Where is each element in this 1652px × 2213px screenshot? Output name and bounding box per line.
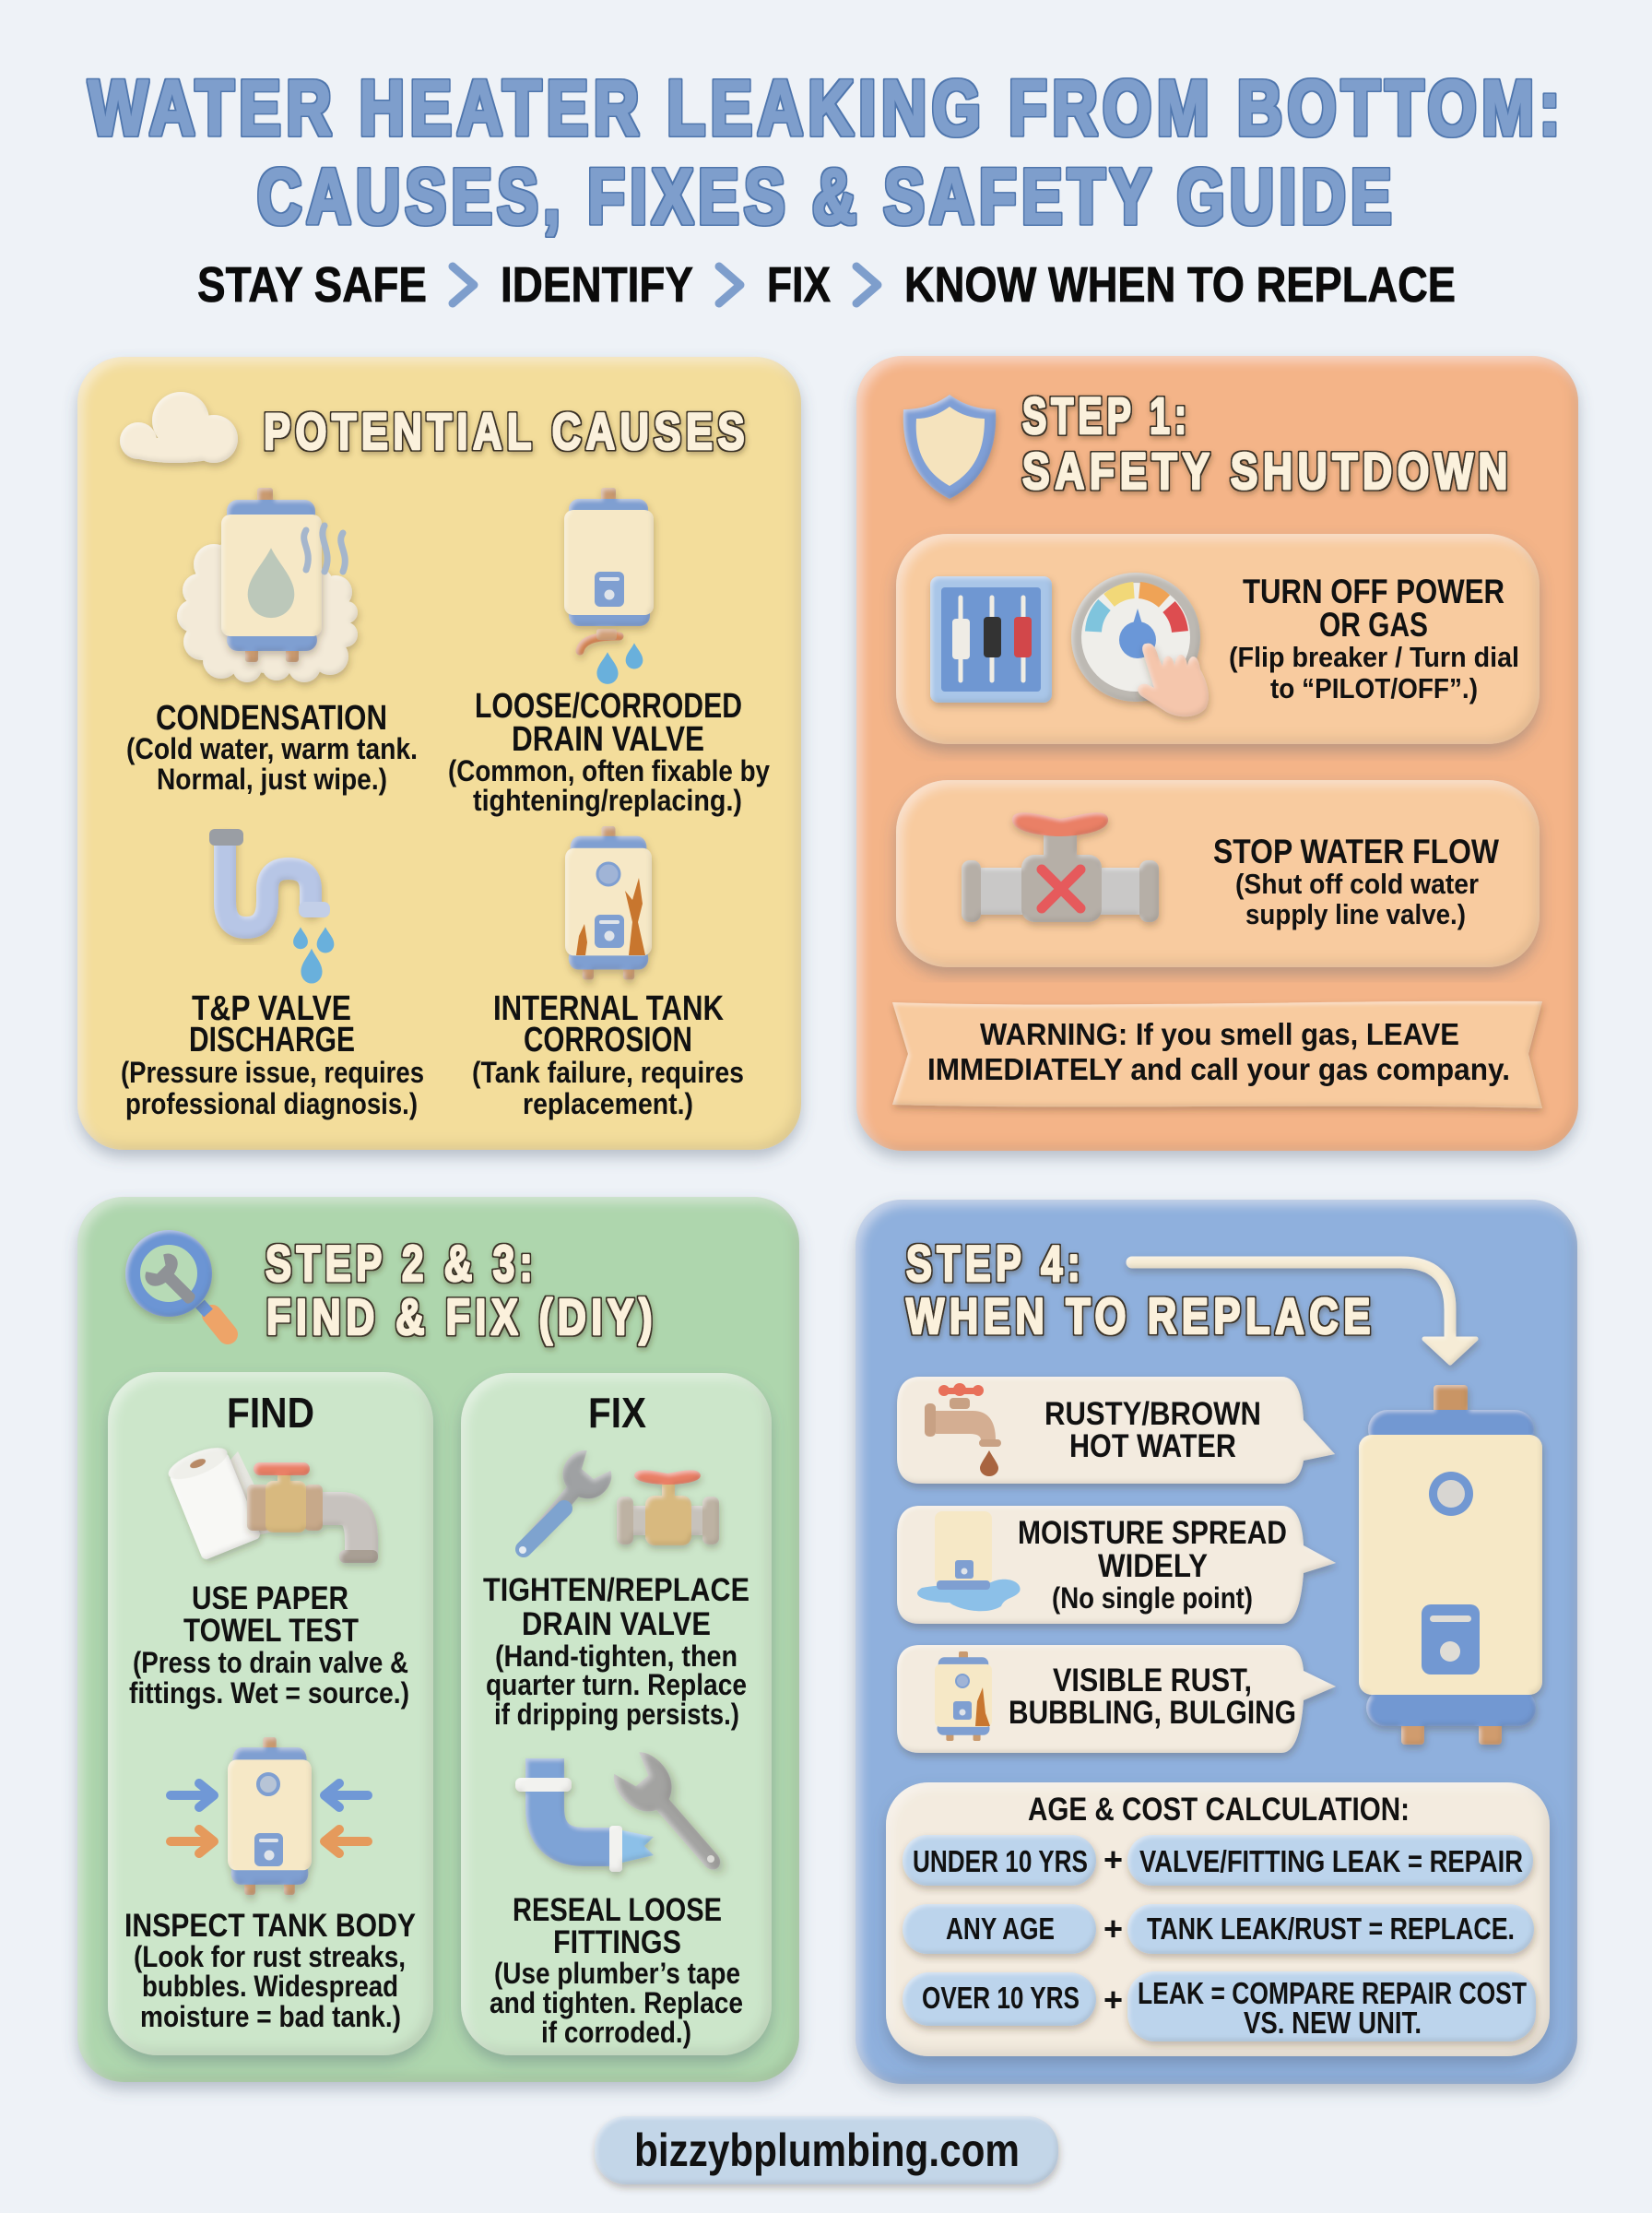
- heading: step 2 and 3: STEP 2 & 3:: [266, 1235, 537, 1292]
- row: any age: +: [1103, 1910, 1123, 1947]
- text: rusty water: HOT WATER: [1069, 1428, 1236, 1464]
- row: over 10 years: LEAK = COMPARE REPAIR COST: [1138, 1976, 1527, 2010]
- text: stop water flow: [1213, 833, 1499, 930]
- bubble: moisture spread: [897, 1506, 1336, 1624]
- text: paper towel test: TOWEL TEST: [183, 1613, 359, 1649]
- text: stop water flow: supply line valve.): [1245, 898, 1466, 930]
- text: paper towel test: USE PAPER: [192, 1580, 348, 1616]
- text: rusty water: RUSTY/BROWN: [1044, 1396, 1261, 1432]
- text: internal corrosion: INTERNAL TANK: [493, 989, 724, 1028]
- text: internal corrosion: CORROSION: [524, 1021, 692, 1059]
- text: drain valve: LOOSE/CORRODED: [475, 687, 742, 726]
- text: drain valve: DRAIN VALVE: [512, 720, 704, 759]
- heading: find: FIND: [227, 1389, 314, 1437]
- icon: wrench and drain valve: [514, 1445, 719, 1555]
- text: condensation: (Cold water, warm tank.: [126, 732, 418, 765]
- text: tighten replace drain valve: (Hand-tighten, then: [495, 1639, 738, 1673]
- heading: step 1: [1022, 386, 1513, 500]
- subtitle: process steps: [197, 257, 1456, 313]
- heading: step 1: STEP 1:: [1022, 386, 1191, 444]
- row: any age: [903, 1904, 1534, 1954]
- title: [88, 65, 1565, 240]
- text: reseal fittings: RESEAL LOOSE: [513, 1892, 722, 1928]
- footer: website pill: [595, 2116, 1058, 2184]
- icon: breaker panel: [930, 576, 1052, 703]
- text: turn off power: OR GAS: [1319, 606, 1428, 644]
- text: moisture spread: WIDELY: [1098, 1548, 1208, 1584]
- text: reseal fittings: if corroded.): [541, 2016, 691, 2049]
- panel: step 2 and 3 find and fix: [77, 1197, 799, 2082]
- row: any age: TANK LEAK/RUST = REPLACE.: [1147, 1911, 1515, 1946]
- warning ribbon: WARNING: If you smell gas, LEAVE: [980, 1017, 1459, 1051]
- text: stop water flow: (Shut off cold water: [1235, 868, 1479, 900]
- text: paper towel test: (Press to drain valve &: [133, 1646, 408, 1679]
- text: turn off power: TURN OFF POWER: [1243, 573, 1504, 610]
- text: inspect tank body: [124, 1908, 416, 2033]
- text: inspect tank body: (Look for rust streaks,: [134, 1940, 406, 1973]
- column: fix: [461, 1373, 772, 2055]
- text: drain valve: [448, 687, 770, 817]
- text: T&P valve: professional diagnosis.): [125, 1087, 418, 1120]
- text: inspect tank body: bubbles. Widespread: [142, 1970, 398, 2003]
- text: tighten replace drain valve: TIGHTEN/REPLACE: [483, 1572, 749, 1608]
- subtitle: process steps: STAY SAFE: [197, 257, 427, 313]
- text: paper towel test: [129, 1580, 409, 1710]
- text: paper towel test: fittings. Wet = source.): [129, 1676, 409, 1710]
- text: drain valve: tightening/replacing.): [473, 784, 742, 817]
- icon: pipe tape and wrench: [515, 1746, 738, 1885]
- warning ribbon: IMMEDIATELY and call your gas company.: [927, 1052, 1510, 1086]
- heading: step 1: SAFETY SHUTDOWN: [1022, 442, 1513, 500]
- row: over 10 years: OVER 10 YRS: [922, 1981, 1080, 2015]
- card: turn off power: [896, 534, 1540, 744]
- panel: potential causes: [77, 357, 801, 1150]
- heading: step 2 and 3: FIND & FIX (DIY): [266, 1288, 657, 1345]
- row: under 10 years: [903, 1835, 1533, 1886]
- text: T&P valve: T&P VALVE: [192, 989, 351, 1028]
- arrow: to water heater: [1132, 1262, 1476, 1363]
- text: tighten replace drain valve: DRAIN VALVE: [522, 1606, 711, 1642]
- text: T&P valve: DISCHARGE: [189, 1021, 355, 1059]
- text: T&P valve: (Pressure issue, requires: [121, 1056, 424, 1089]
- text: moisture spread: MOISTURE SPREAD: [1018, 1515, 1287, 1551]
- heading: fix: FIX: [588, 1389, 646, 1437]
- text: inspect tank body: moisture = bad tank.): [140, 2000, 401, 2033]
- text: inspect tank body: INSPECT TANK BODY: [124, 1908, 416, 1944]
- text: reseal fittings: (Use plumber’s tape: [494, 1957, 740, 1990]
- text: turn off power: [1229, 573, 1519, 704]
- panel: step 1 safety shutdown: [856, 356, 1578, 1151]
- text: tighten replace drain valve: quarter turn. Replace: [486, 1668, 747, 1701]
- text: tighten replace drain valve: [483, 1572, 749, 1731]
- icon: inspect tank with arrows: [171, 1737, 368, 1895]
- row: under 10 years: UNDER 10 YRS: [913, 1844, 1088, 1878]
- icon: large water heater: [1359, 1385, 1542, 1745]
- icon: heater with puddle: [917, 1511, 1021, 1611]
- icon: T&P discharge pipe: [209, 829, 334, 984]
- heading: potential causes: POTENTIAL CAUSES: [264, 402, 749, 460]
- text: reseal fittings: and tighten. Replace: [490, 1986, 743, 2019]
- icon: rusty faucet: [925, 1383, 1001, 1476]
- text: reseal fittings: [490, 1892, 743, 2049]
- row: under 10 years: +: [1103, 1840, 1123, 1878]
- text: stop water flow: STOP WATER FLOW: [1213, 833, 1499, 870]
- text: rusty water: [1044, 1396, 1261, 1464]
- icon: condensation heater: [177, 488, 358, 682]
- text: T&P valve: [121, 989, 424, 1120]
- heading: step 2 and 3: [266, 1235, 657, 1345]
- row: over 10 years: +: [1103, 1981, 1123, 2018]
- text: turn off power: (Flip breaker / Turn dial: [1229, 641, 1519, 673]
- text: visible rust: [1009, 1663, 1296, 1731]
- heading: age and cost: AGE & COST CALCULATION:: [1028, 1792, 1410, 1828]
- card: age and cost calculation: [886, 1782, 1550, 2056]
- column: find: [108, 1372, 433, 2055]
- icon: gas dial with hand: [1071, 573, 1209, 716]
- icon: corroded tank: [565, 826, 652, 979]
- warning ribbon: [892, 1001, 1542, 1108]
- text: turn off power: to “PILOT/OFF”.): [1270, 672, 1478, 704]
- bubble: rusty hot water: [897, 1377, 1335, 1484]
- row: any age: ANY AGE: [946, 1911, 1055, 1946]
- text: visible rust: VISIBLE RUST,: [1053, 1663, 1252, 1698]
- panel: step 4 when to replace: [856, 1200, 1577, 2084]
- text: drain valve: (Common, often fixable by: [448, 754, 770, 787]
- icon: shutoff valve: [962, 812, 1159, 922]
- text: moisture spread: (No single point): [1052, 1581, 1253, 1615]
- text: visible rust: BUBBLING, BULGING: [1009, 1695, 1296, 1731]
- footer: website pill: bizzybplumbing.com: [634, 2124, 1020, 2176]
- subtitle: process steps: KNOW WHEN TO REPLACE: [904, 257, 1456, 313]
- text: tighten replace drain valve: if dripping persists.): [494, 1698, 739, 1731]
- text: moisture spread: [1018, 1515, 1287, 1615]
- subtitle: process steps: FIX: [767, 257, 831, 313]
- text: condensation: [126, 699, 418, 796]
- card: stop water flow: [896, 780, 1540, 967]
- text: condensation: CONDENSATION: [156, 699, 387, 738]
- text: condensation: Normal, just wipe.): [157, 763, 387, 796]
- icon: magnifier with wrench: [133, 1237, 228, 1334]
- icon: rusty heater: [935, 1651, 992, 1741]
- subtitle: process steps: IDENTIFY: [501, 257, 693, 313]
- row: under 10 years: VALVE/FITTING LEAK = REPAIR: [1139, 1844, 1523, 1878]
- icon: loose drain valve heater: [564, 488, 654, 684]
- text: internal corrosion: replacement.): [523, 1087, 693, 1120]
- text: internal corrosion: (Tank failure, requires: [472, 1056, 744, 1089]
- text: reseal fittings: FITTINGS: [553, 1924, 681, 1960]
- row: over 10 years: VS. NEW UNIT.: [1244, 2006, 1422, 2040]
- heading: step 4: [906, 1235, 1375, 1344]
- heading: step 4: WHEN TO REPLACE: [906, 1287, 1375, 1344]
- row: over 10 years: [903, 1971, 1536, 2041]
- bubble: visible rust: [897, 1645, 1336, 1753]
- icon: shield: [903, 395, 996, 499]
- heading: step 4: STEP 4:: [906, 1235, 1085, 1292]
- icon: cloud: [120, 392, 238, 463]
- text: internal corrosion: [472, 989, 744, 1120]
- icon: paper towel and tap: [165, 1441, 378, 1563]
